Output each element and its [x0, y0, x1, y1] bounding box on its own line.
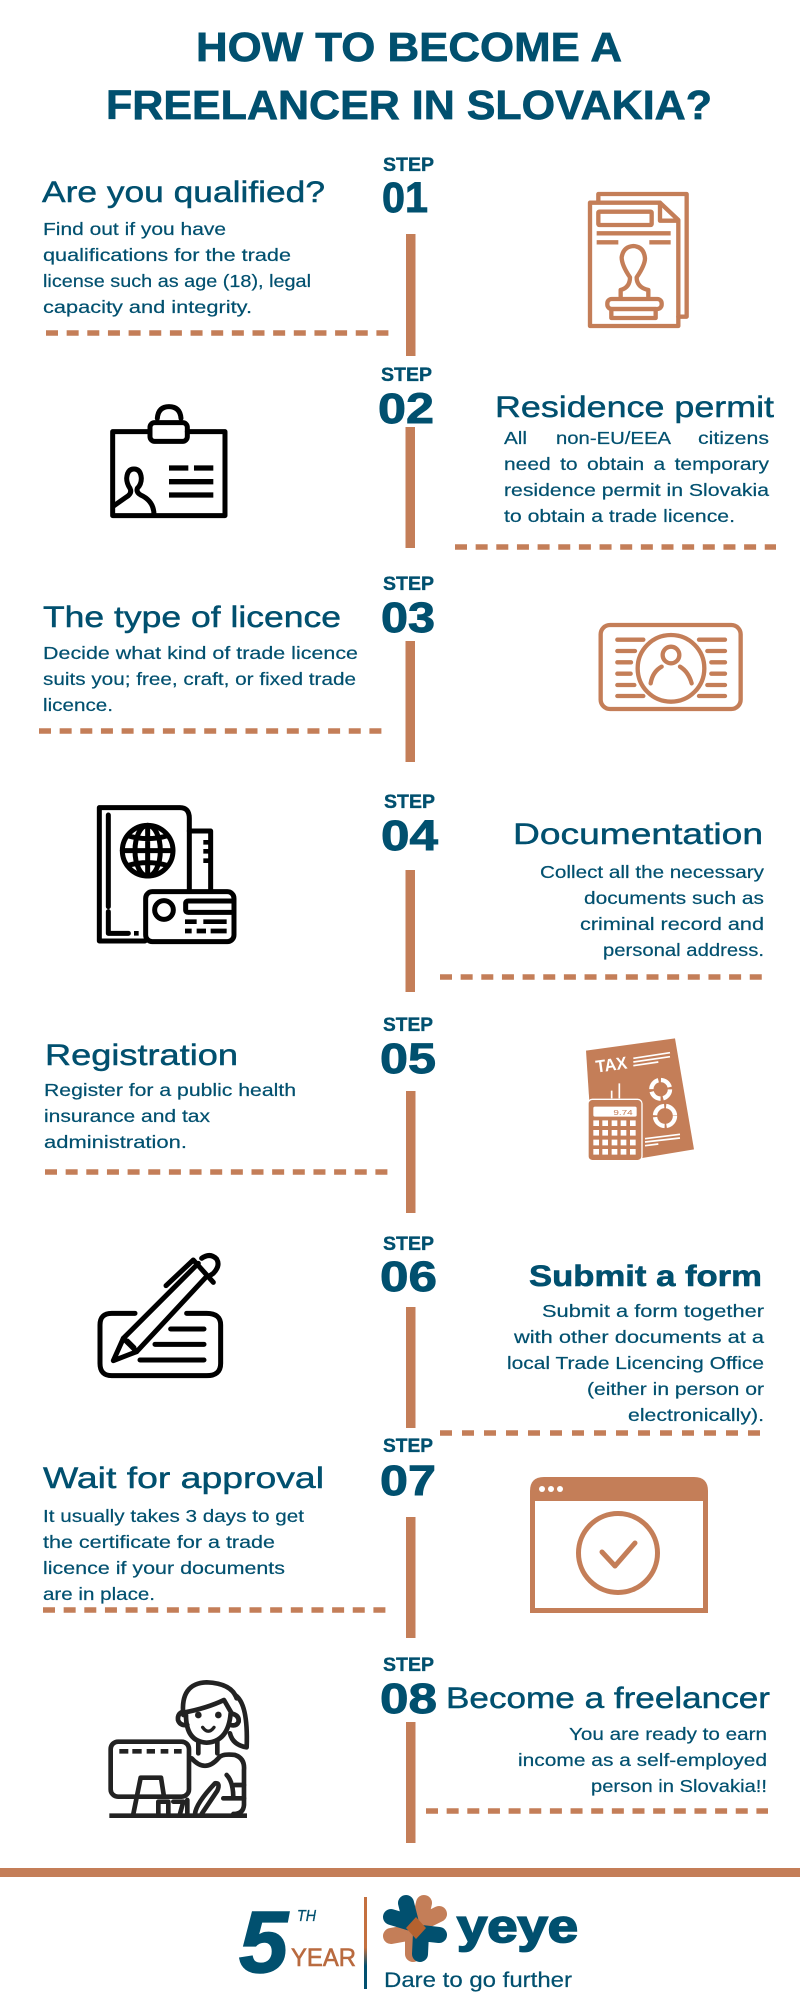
step 7 label [380, 1436, 436, 1505]
step 7 text [43, 1506, 304, 1604]
footer divider [364, 1897, 367, 1989]
step 2 label: 02 [378, 385, 434, 433]
panel: step 2 [113, 365, 776, 548]
step 6 text: Submit a form together [542, 1301, 764, 1321]
step 5 text [44, 1080, 296, 1152]
footer: yeye logo: yeye [457, 1900, 578, 1952]
step 6 connector [406, 1307, 416, 1428]
step 5 text: Register for a public health [44, 1080, 296, 1100]
icon: yeye star mark [391, 1903, 439, 1954]
step 5 text: administration. [44, 1132, 187, 1152]
step 1 label: 01 [382, 174, 428, 222]
step 4 connector [406, 870, 415, 992]
step 4 heading: Documentation [513, 818, 763, 851]
icon: licence card [601, 625, 741, 709]
step 1 connector [406, 234, 416, 356]
icon: ID badge [113, 407, 225, 516]
icon: tax form and calculator [586, 1038, 694, 1161]
step 2 text [504, 428, 769, 526]
step 4 label [381, 792, 438, 860]
step 3 label: STEP [383, 574, 434, 595]
icon: browser window with check [530, 1477, 708, 1610]
step 3 label [381, 574, 435, 642]
step 2 label [378, 365, 434, 433]
footer: anniversary logo: 5 [239, 1894, 290, 1991]
footer: yeye logo [384, 1900, 578, 1992]
step 3 text [43, 643, 358, 715]
step 6 dashed divider [440, 1430, 761, 1436]
step 2 text: All [504, 428, 527, 448]
step 7 text: are in place. [43, 1584, 155, 1604]
step 1 label: STEP [383, 155, 434, 176]
step 1 text: Find out if you have [43, 219, 226, 239]
panel: step 6 [100, 1234, 764, 1433]
step 3 text: licence. [43, 695, 113, 715]
step 2 label: STEP [381, 365, 432, 386]
step 6 text: with other documents at a [513, 1327, 764, 1347]
step 5 label: 05 [380, 1035, 436, 1083]
panel: step 7 [43, 1436, 708, 1638]
step 1 text: qualifications for the trade [43, 245, 291, 265]
step 2 text: citizens [698, 428, 769, 448]
step 5 label [380, 1015, 436, 1083]
panel: step 1 [42, 155, 687, 356]
step 1 heading: Are you qualified? [42, 176, 325, 209]
step 8 label: 08 [380, 1675, 437, 1723]
step 2 connector [406, 427, 415, 548]
footer: anniversary logo [239, 1894, 356, 1991]
step 1 text [43, 219, 311, 317]
step 7 label: STEP [383, 1436, 433, 1457]
step 4 text: Collect all the necessary [540, 862, 764, 882]
step 5 heading: Registration [45, 1039, 238, 1072]
step 6 text: local Trade Licencing Office [507, 1353, 764, 1373]
step 7 connector [406, 1517, 416, 1638]
step 6 label: 06 [380, 1253, 437, 1301]
step 6 heading: Submit a form [529, 1260, 762, 1293]
step 8 label: STEP [383, 1655, 434, 1676]
step 8 dashed divider [426, 1808, 768, 1814]
step 1 text: license such as age (18), legal [43, 271, 311, 291]
icon: tax form and calculator: TAX [594, 1052, 629, 1077]
step 8 label [380, 1655, 437, 1723]
step 6 text: electronically). [628, 1405, 764, 1425]
step 2 dashed divider [455, 544, 776, 550]
panel: step 5 [44, 1015, 694, 1213]
step 8 text [518, 1724, 767, 1796]
step 4 dashed divider [440, 974, 763, 980]
step 5 dashed divider [45, 1169, 389, 1175]
step 7 dashed divider [43, 1607, 386, 1613]
step 5 text: insurance and tax [44, 1106, 210, 1126]
step 1 dashed divider [46, 330, 389, 336]
step 3 label: 03 [381, 594, 435, 642]
step 4 label: STEP [384, 792, 435, 813]
icon: passport and card [99, 808, 234, 942]
step 8 text: You are ready to earn [569, 1724, 767, 1744]
title: HOW TO BECOME A [196, 24, 622, 70]
step 4 text [540, 862, 764, 960]
step 8 text: person in Slovakia!! [591, 1776, 767, 1796]
step 6 label: STEP [383, 1234, 434, 1255]
step 1 text: capacity and integrity. [43, 297, 252, 317]
step 4 label: 04 [381, 812, 438, 860]
footer: anniversary logo: TH [297, 1908, 316, 1925]
step 1 label [382, 155, 434, 222]
step 8 heading: Become a freelancer [446, 1682, 770, 1715]
step 3 text: Decide what kind of trade licence [43, 643, 358, 663]
step 2 heading: Residence permit [495, 391, 774, 424]
icon: tax form and calculator: 9.74 [613, 1108, 634, 1117]
step 4 text: personal address. [603, 940, 764, 960]
title: FREELANCER IN SLOVAKIA? [106, 82, 712, 128]
footer: yeye logo: Dare to go further [384, 1969, 572, 1992]
footer rule [0, 1868, 800, 1877]
step 6 text: (either in person or [587, 1379, 764, 1399]
step 7 text: licence if your documents [43, 1558, 285, 1578]
panel: step 8 [109, 1655, 770, 1843]
step 3 heading: The type of licence [43, 601, 341, 634]
step 7 text: It usually takes 3 days to get [43, 1506, 304, 1526]
step 4 text: criminal record and [580, 914, 764, 934]
step 2 text: to obtain a trade licence. [504, 506, 735, 526]
step 5 connector [406, 1091, 416, 1213]
step 2 text: residence permit in Slovakia [504, 480, 769, 500]
step 3 connector [406, 641, 415, 762]
step 4 text: documents such as [584, 888, 764, 908]
step 3 text: suits you; free, craft, or fixed trade [43, 669, 356, 689]
title [106, 24, 712, 128]
icon: documents and stamp [590, 194, 687, 326]
step 8 text: income as a self-employed [518, 1750, 767, 1770]
panel: step 4 [99, 792, 764, 992]
step 2 text: need to obtain a temporary [504, 454, 769, 474]
icon: freelancer at computer [109, 1682, 247, 1818]
step 6 label [380, 1234, 437, 1301]
icon: pen signing form [100, 1255, 221, 1376]
step 7 heading: Wait for approval [43, 1462, 324, 1495]
step 6 text [507, 1301, 764, 1425]
step 7 text: the certificate for a trade [43, 1532, 275, 1552]
panel: step 3 [39, 574, 741, 762]
step 2 text: non-EU/EEA [556, 428, 671, 448]
footer: anniversary logo: YEAR [291, 1944, 356, 1972]
step 8 connector [406, 1722, 416, 1843]
step 7 label: 07 [380, 1457, 436, 1505]
step 5 label: STEP [383, 1015, 433, 1036]
step 3 dashed divider [39, 728, 382, 734]
